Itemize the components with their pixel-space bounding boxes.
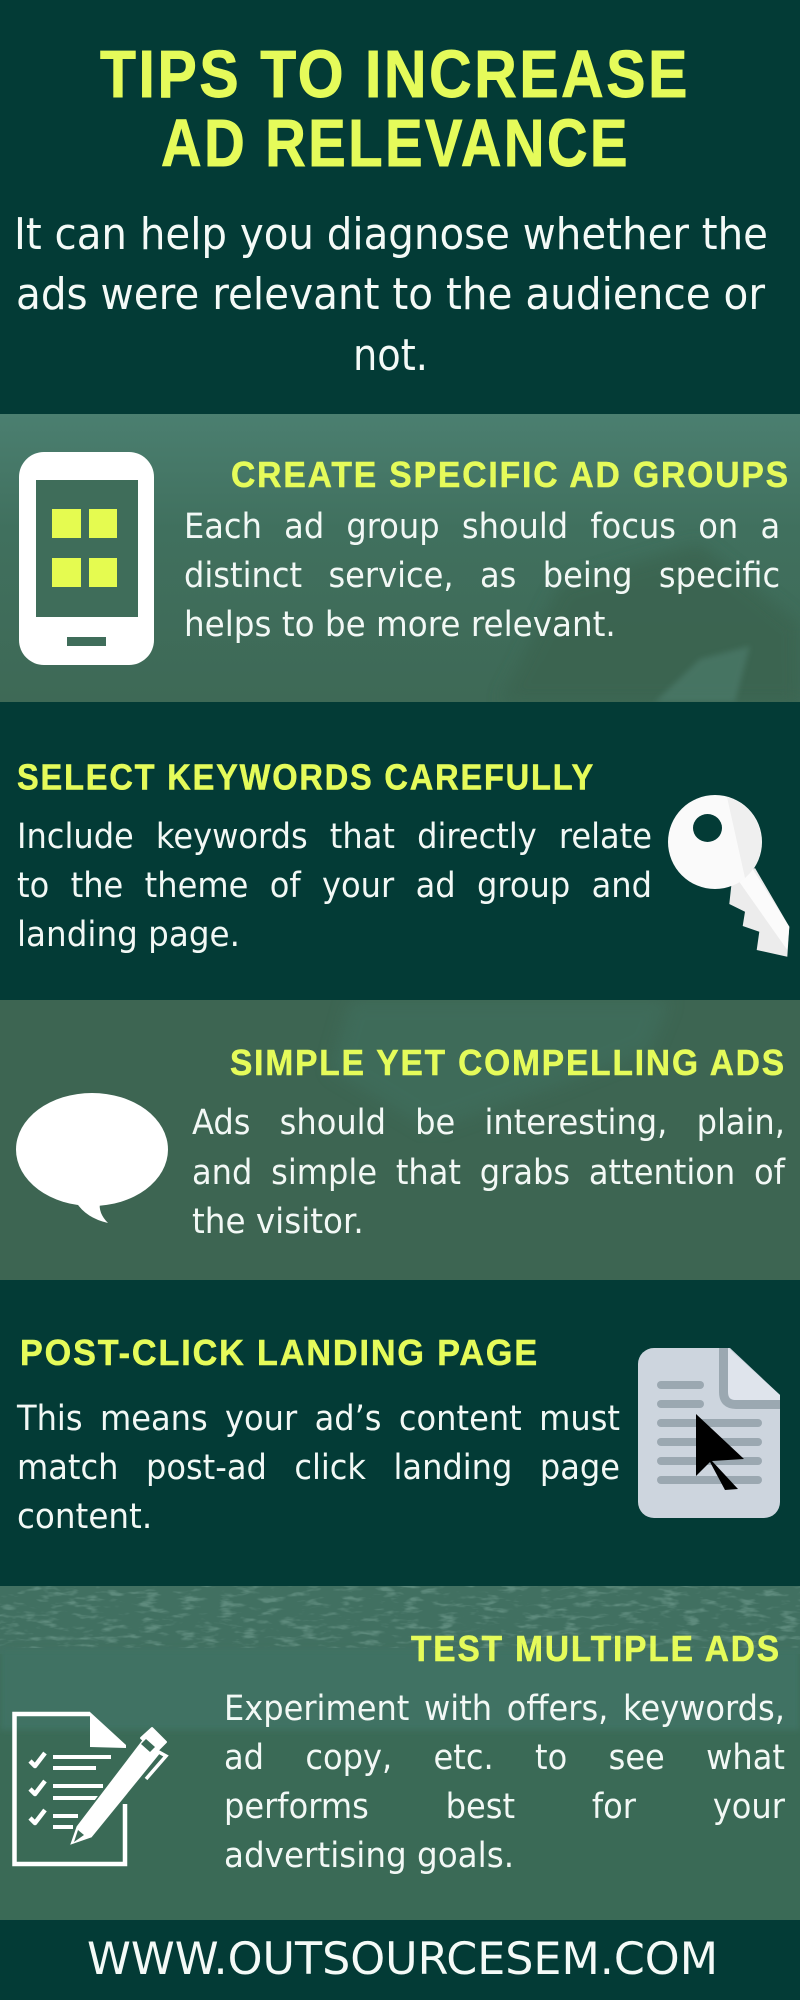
body text: performs best for your [224,1787,785,1827]
body text: match post-ad click landing page [17,1448,620,1488]
panel: post-click landing page [16,1332,780,1537]
panel: header [14,37,768,381]
body text: Ads should be interesting, plain, [192,1103,785,1143]
body text: ad copy, etc. to see what [224,1738,785,1778]
icon: checklist and pen [14,1712,166,1864]
title: AD RELEVANCE [161,106,630,181]
icon: speech bubble [16,1093,168,1223]
panel: select keywords carefully [17,756,790,957]
body text [16,1399,620,1537]
panel: simple yet compelling ads [0,1000,800,1280]
panel: create specific ad groups [0,414,800,702]
body text: helps to be more relevant. [184,605,616,645]
body text: advertising goals. [224,1836,514,1876]
body text [184,507,780,645]
body text: content. [17,1497,152,1537]
body text: Include keywords that directly relate [17,817,652,857]
body text: This means your ad’s content must [17,1399,620,1439]
body text [224,1688,785,1876]
intro text: not. [353,330,428,381]
body text: Each ad group should focus on a [184,507,780,547]
body text: and simple that grabs attention of [192,1153,785,1193]
icon: key [668,795,789,957]
title [100,37,690,181]
intro text [14,209,768,381]
body text: the visitor. [192,1202,364,1242]
panel: test multiple ads [0,1586,800,1920]
title: TIPS TO INCREASE [100,37,690,112]
heading: TEST MULTIPLE ADS [411,1628,781,1669]
body text [17,817,652,955]
body text: landing page. [17,915,240,955]
body text: Experiment with offers, keywords, [224,1688,785,1728]
body text: to the theme of your ad group and [17,866,652,906]
icon: document with cursor [638,1348,780,1518]
body text: distinct service, as being specific [184,556,780,596]
body text [192,1103,786,1242]
heading: SELECT KEYWORDS CAREFULLY [17,756,595,798]
heading: POST-CLICK LANDING PAGE [20,1332,539,1373]
icon: smartphone [19,452,154,665]
website url: WWW.OUTSOURCESEM.COM [87,1934,718,1985]
